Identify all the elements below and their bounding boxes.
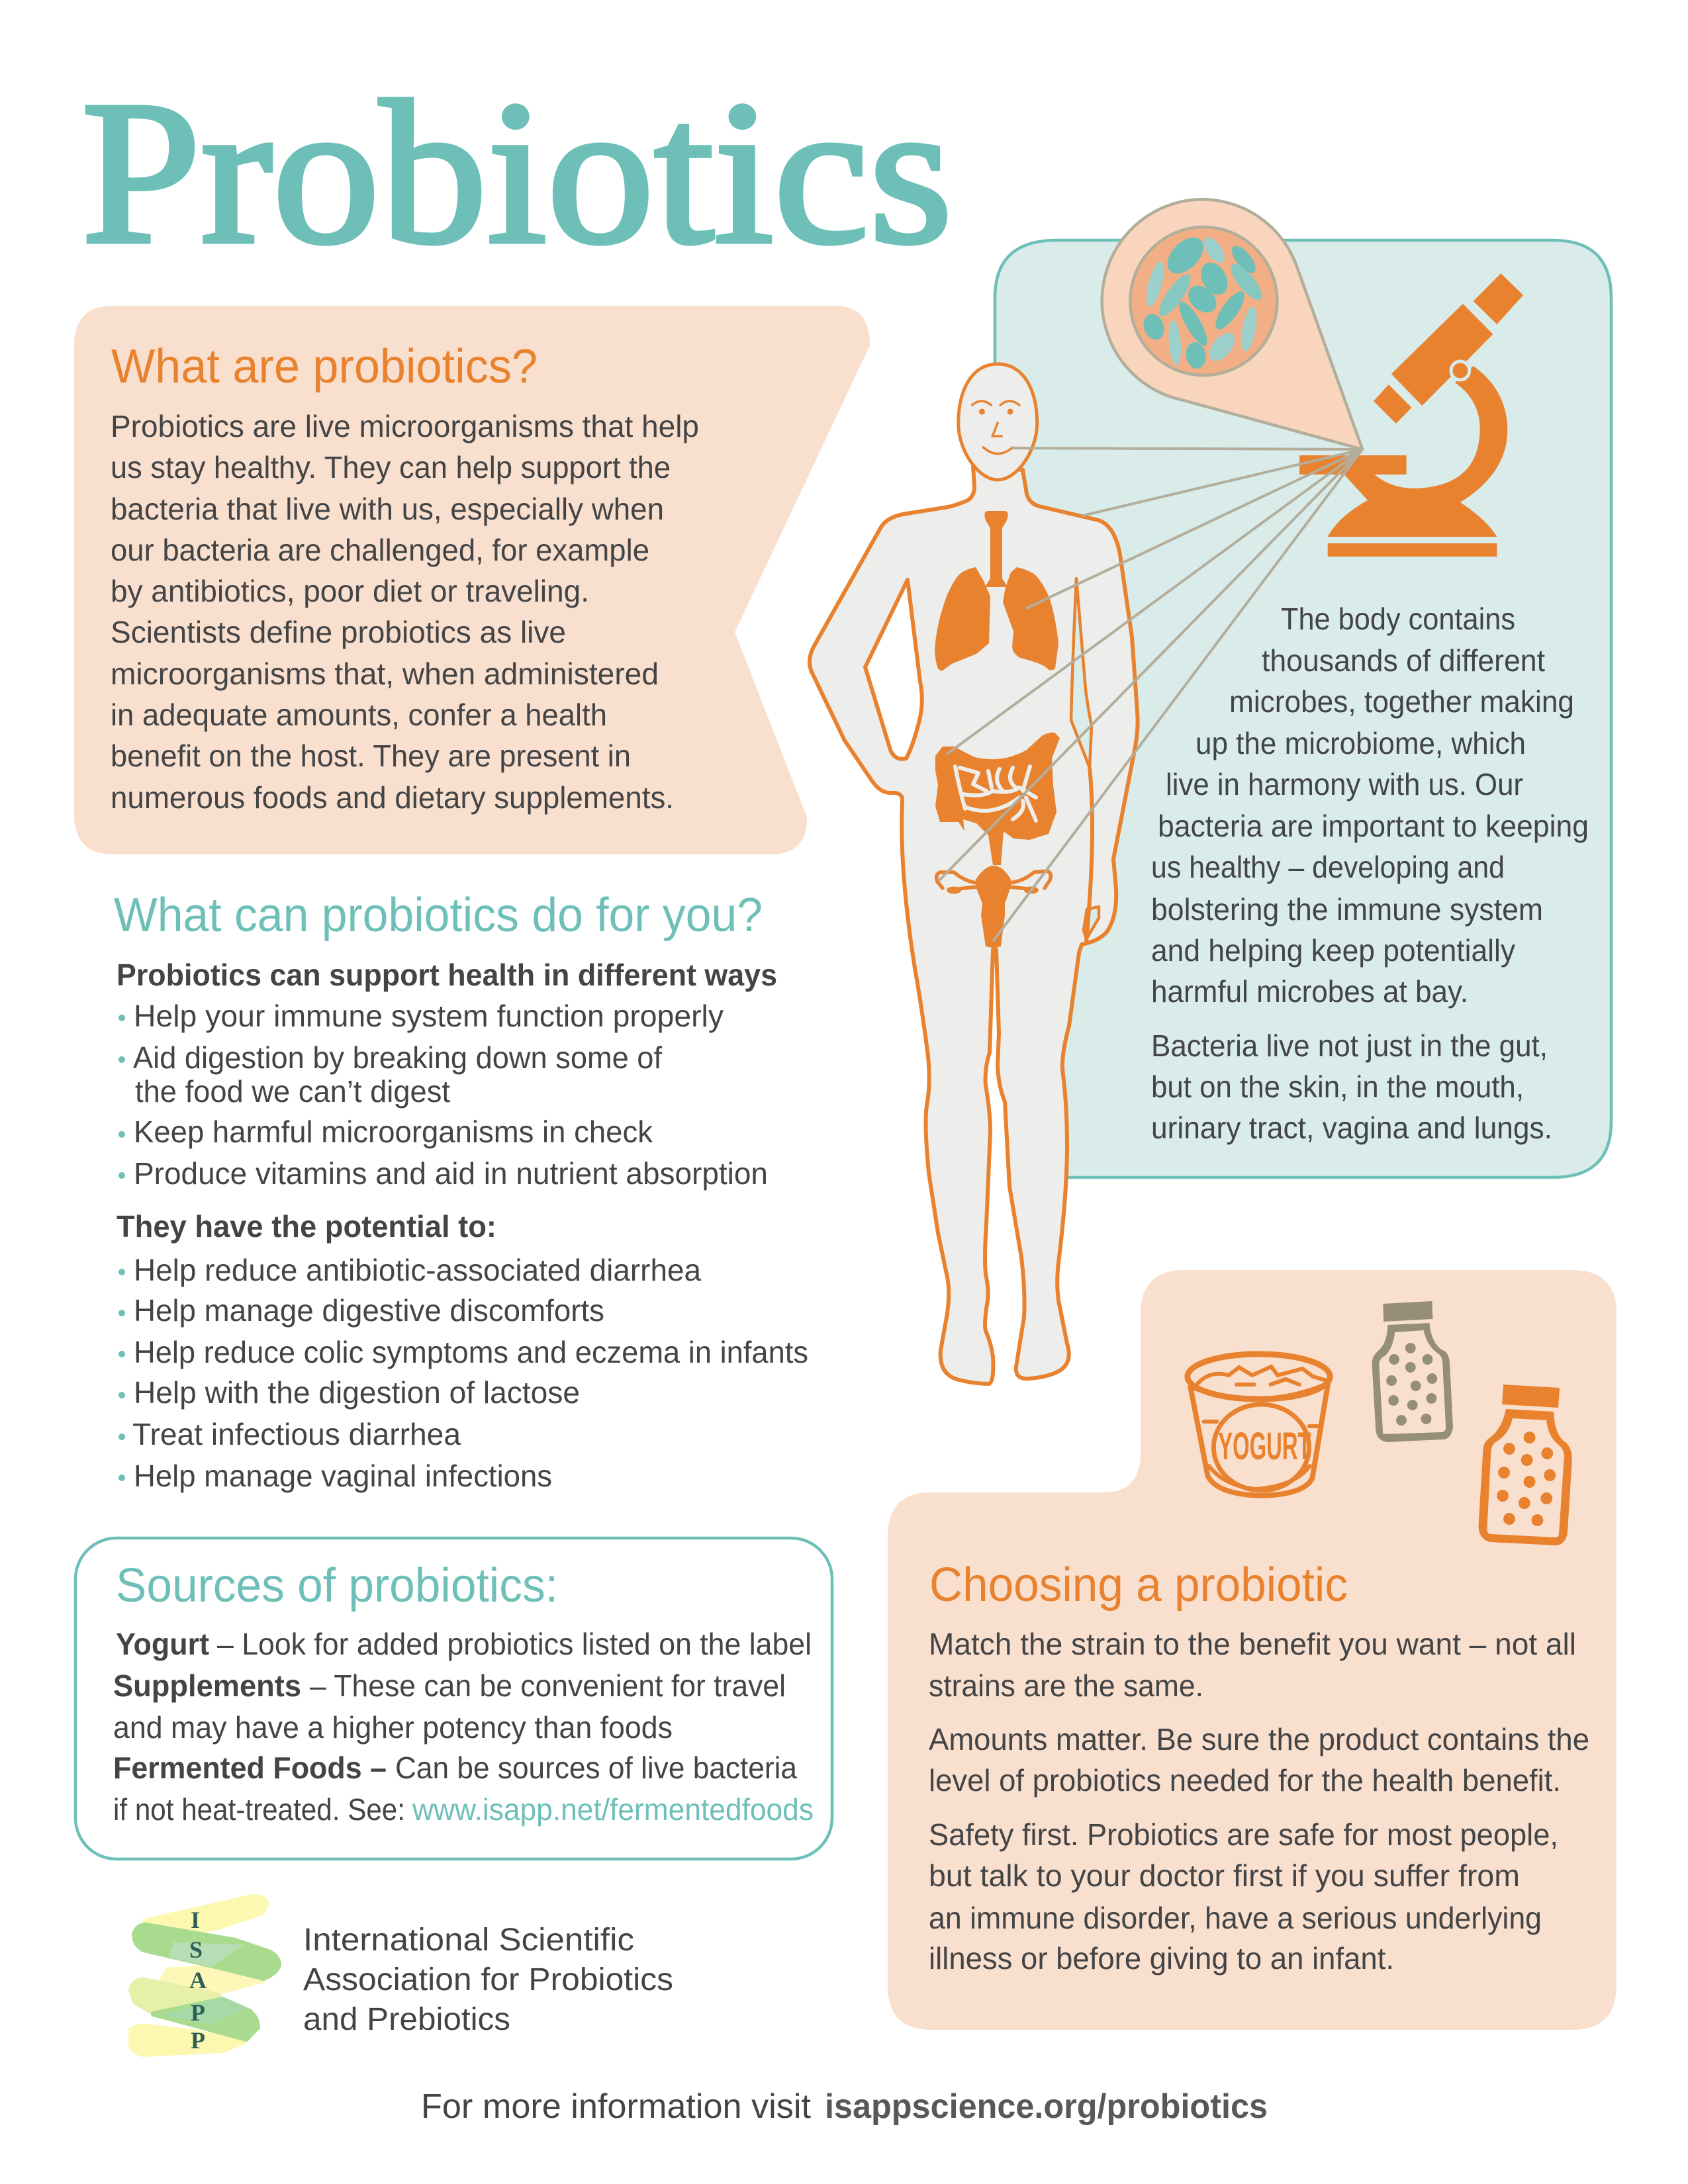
arm gap left: [865, 580, 922, 759]
callout: magnified bacteria: [1102, 199, 1362, 449]
text block: microbiome: Bacteria live not just in the gut,: [1151, 1028, 1548, 1063]
panel: what are probiotics: [74, 306, 870, 854]
text block: definition: in adequate amounts, confer a health: [111, 698, 607, 732]
text block: sources list: Yogurt: [116, 1627, 209, 1661]
subheading: support health: Probiotics can support health in different ways: [117, 958, 777, 992]
text block: microbiome: up the microbiome, which: [1196, 726, 1526, 760]
text block: definition: Probiotics are live microorganisms that help: [111, 409, 699, 443]
logo text: organization name: International Scientific: [303, 1923, 634, 1958]
text block: sources list: – These can be convenient for travel: [310, 1668, 786, 1703]
panel: what can probiotics do for you: [114, 889, 808, 1493]
text block: choosing advice: Safety first. Probiotics are safe for most people,: [929, 1817, 1558, 1852]
text block: definition: microorganisms that, when administered: [111, 657, 659, 691]
list: health benefits: Keep harmful microorganisms in check: [134, 1115, 653, 1149]
text block: microbiome: [1151, 602, 1589, 1145]
panel: sources of probiotics: [75, 1538, 832, 1859]
logo: ISAPP helix: [131, 1897, 279, 2054]
organ: trachea and lungs: [935, 511, 1058, 671]
logo letters: P: [191, 2027, 205, 2054]
arm gap right: [1071, 578, 1099, 939]
organ: uterus: [937, 866, 1051, 953]
logo text: organization name: [303, 1923, 673, 2037]
text block: definition: benefit on the host. They are present in: [111, 739, 631, 773]
text block: microbiome: bolstering the immune system: [1151, 892, 1543, 927]
panel: microbiome: [995, 240, 1611, 1177]
text block: microbiome: harmful microbes at bay.: [1151, 974, 1468, 1009]
list: potential benefits: Help reduce colic symptoms and eczema in infants: [134, 1335, 808, 1369]
text block: microbiome: thousands of different: [1262, 643, 1545, 678]
organ: intestines: [935, 733, 1060, 865]
text block: definition: bacteria that live with us, especially when: [111, 492, 664, 526]
footer: isappscience.org/probiotics: [825, 2087, 1268, 2126]
list: health benefits: the food we can’t digest: [135, 1074, 450, 1109]
footer: [421, 2087, 1268, 2126]
text block: microbiome: live in harmony with us. Our: [1166, 767, 1523, 801]
logo letters: [189, 1907, 207, 2054]
heading: sources: Sources of probiotics:: [116, 1559, 558, 1612]
yogurt label: YOGURT: [1218, 1426, 1311, 1468]
callout lines: [939, 448, 1362, 940]
footer: For more information visit: [421, 2087, 812, 2126]
text block: sources list: Can be sources of live bacteria: [395, 1751, 797, 1785]
icon: grey bottle: [1372, 1301, 1453, 1442]
figure: human body: [810, 364, 1138, 1384]
text block: sources list: [113, 1627, 814, 1827]
icon: orange bottle: [1479, 1385, 1572, 1545]
heading: choosing: Choosing a probiotic: [929, 1559, 1348, 1612]
list: potential benefits: Help reduce antibiotic-associated diarrhea: [134, 1253, 701, 1287]
text block: definition: Scientists define probiotics as live: [111, 615, 566, 649]
text block: microbiome: us healthy – developing and: [1151, 850, 1505, 884]
text block: microbiome: microbes, together making: [1229, 684, 1574, 719]
text block: definition: by antibiotics, poor diet or traveling.: [111, 574, 589, 608]
text block: sources list: www.isapp.net/fermentedfoods: [412, 1792, 814, 1827]
text block: microbiome: urinary tract, vagina and lungs.: [1151, 1111, 1552, 1145]
text block: choosing advice: strains are the same.: [929, 1668, 1203, 1703]
head and face: [959, 364, 1037, 480]
bacteria: [1140, 231, 1267, 370]
list: health benefits: Produce vitamins and aid in nutrient absorption: [134, 1156, 768, 1191]
text block: definition: [111, 409, 699, 815]
text block: choosing advice: an immune disorder, have a serious underlying: [929, 1901, 1542, 1935]
logo text: organization name: and Prebiotics: [303, 2002, 510, 2037]
text block: sources list: if not heat-treated. See:: [113, 1792, 405, 1827]
list: health benefits: Aid digestion by breaking down some of: [133, 1040, 662, 1075]
list: potential benefits: Help with the digestion of lactose: [134, 1375, 580, 1410]
text block: microbiome: but on the skin, in the mouth,: [1151, 1069, 1524, 1104]
text block: microbiome: bacteria are important to keeping: [1158, 809, 1589, 843]
text block: choosing advice: but talk to your doctor first if you suffer from: [929, 1858, 1520, 1893]
list: potential benefits: Treat infectious diarrhea: [132, 1417, 461, 1451]
heading: what can probiotics do: What can probiotics do for you?: [114, 889, 763, 942]
text block: definition: our bacteria are challenged, for example: [111, 533, 649, 567]
text block: sources list: – Look for added probiotics listed on the label: [217, 1627, 812, 1661]
logo letters: I: [191, 1907, 200, 1933]
icon: yogurt cup: [1188, 1354, 1330, 1496]
text block: sources list: and may have a higher potency than foods: [113, 1710, 673, 1745]
text block: sources list: Supplements: [113, 1668, 301, 1703]
text block: choosing advice: illness or before giving to an infant.: [929, 1941, 1394, 1976]
text block: choosing advice: [929, 1627, 1589, 1976]
subheading: potential: They have the potential to:: [117, 1209, 496, 1244]
text block: choosing advice: Amounts matter. Be sure the product contains the: [929, 1722, 1589, 1756]
text block: choosing advice: level of probiotics needed for the health benefit.: [929, 1763, 1561, 1797]
logo text: organization name: Association for Probiotics: [303, 1962, 673, 1997]
text block: choosing advice: Match the strain to the benefit you want – not all: [929, 1627, 1576, 1661]
text block: microbiome: The body contains: [1281, 602, 1515, 636]
text block: sources list: Fermented Foods –: [113, 1751, 387, 1785]
logo letters: P: [191, 1999, 205, 2026]
list: potential benefits: Help manage digestive discomforts: [134, 1293, 604, 1328]
list: health benefits: Help your immune system function properly: [134, 999, 724, 1033]
logo letters: A: [189, 1967, 207, 1993]
text block: microbiome: and helping keep potentially: [1151, 933, 1515, 968]
list: health benefits: [118, 999, 768, 1191]
logo letters: S: [189, 1936, 203, 1963]
list: potential benefits: [118, 1253, 808, 1493]
text block: definition: us stay healthy. They can help support the: [111, 450, 671, 484]
panel: choosing a probiotic: [888, 1270, 1617, 2030]
title: Probiotics: [81, 60, 953, 287]
list: potential benefits: Help manage vaginal infections: [134, 1459, 552, 1493]
icon: microscope: [1299, 273, 1523, 557]
text block: definition: numerous foods and dietary supplements.: [111, 780, 674, 815]
heading: what are probiotics: What are probiotics?: [111, 340, 538, 393]
